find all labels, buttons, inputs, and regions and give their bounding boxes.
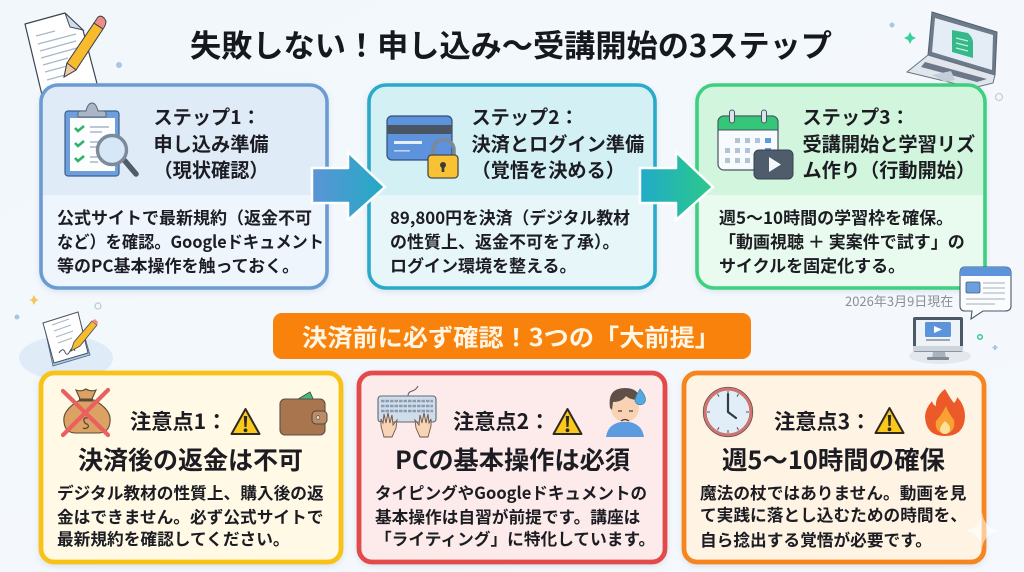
text: caution 3 label: 注意点3： [774, 405, 871, 436]
icon: wallet [280, 392, 327, 435]
text: step 3 body: サイクルを固定化する。 [719, 252, 905, 277]
heading: step 3: ステップ3： [802, 102, 910, 130]
text: step 2 body: 89,800円を決済（デジタル教材 [390, 204, 630, 229]
text: caution 2 body [375, 480, 655, 550]
heading: step 2 [472, 102, 644, 183]
heading: step 1 [154, 102, 269, 183]
text: caution 1 body [57, 480, 324, 550]
icon: browser speech bubble [960, 267, 1011, 319]
icon: keyboard with hands [378, 386, 436, 437]
text: step 1 body: 等のPC基本操作を触っておく。 [57, 252, 299, 277]
decorative dot [116, 62, 122, 68]
text: caution 1 body: 最新規約を確認してください。 [57, 526, 290, 550]
heading: caution 1: 決済後の返金は不可 [78, 441, 303, 477]
heading: step 1: 申し込み準備 [154, 129, 269, 157]
title: 失敗しない！申し込み〜受講開始の3ステップ [190, 21, 832, 66]
icon: warning triangle [232, 409, 260, 434]
text: caution 3 body [700, 480, 967, 551]
text: step 2 body: ログイン環境を整える。 [390, 252, 576, 277]
icon: warning triangle [554, 409, 582, 434]
panel: step 2 [369, 85, 655, 288]
heading: step 2: ステップ2： [472, 102, 579, 130]
text: step 1 body: など）を確認。Googleドキュメント [57, 228, 324, 253]
heading: step 1: （現状確認） [154, 155, 269, 183]
date note: 2026年3月9日現在 [845, 291, 953, 310]
icon: document and pencil top left [25, 13, 106, 95]
text: caution 1 body: デジタル教材の性質上、購入後の返 [57, 480, 324, 504]
text: step 3 body: 週5〜10時間の学習枠を確保。 [719, 204, 953, 229]
text: step 2 body: の性質上、返金不可を了承）。 [390, 228, 620, 253]
heading: caution 2: PCの基本操作は必須 [395, 441, 630, 477]
heading: step 1: ステップ1： [154, 102, 261, 130]
icon: wall clock [703, 387, 753, 437]
banner: 3 prerequisites [273, 313, 751, 359]
decorative dots left [14, 295, 101, 320]
text: caution 2 label: 注意点2： [453, 405, 550, 436]
icon: signing document with blob [19, 312, 113, 380]
panel: step 3 [697, 85, 985, 288]
icon: worried person [606, 388, 645, 437]
decorative dots right [978, 335, 998, 350]
panel: step 1 [41, 85, 327, 288]
text: step 1 body: 公式サイトで最新規約（返金不可 [57, 204, 312, 229]
decorative sparkle bottom right [966, 512, 1000, 548]
icon: crossed money bag [63, 389, 110, 435]
icon: flame [925, 389, 965, 436]
icon: video monitor [909, 317, 971, 364]
heading: step 3 [802, 102, 975, 183]
text: step 2 body [390, 204, 630, 277]
icon: warning triangle [876, 408, 904, 433]
text: step 3 body [719, 204, 965, 277]
heading: step 3: 受講開始と学習リズ [802, 129, 975, 157]
heading: step 2: 決済とログイン準備 [472, 129, 644, 157]
panel: caution 2 [359, 373, 665, 562]
text: caution 2 body: 「ライティング」に特化しています。 [375, 526, 655, 550]
text: caution 2 body: 基本操作は自習が前提です。講座は [375, 504, 641, 528]
text: caution 1 label: 注意点1： [130, 405, 227, 436]
arrow: step 1 to step 2 [312, 152, 385, 220]
decorative sparkles top right [890, 22, 1002, 100]
text: caution 1 body: 金はできません。必ず公式サイトで [57, 504, 324, 528]
text: step 3 body: 「動画視聴 ＋ 実案件で試す」の [719, 228, 965, 253]
icon: laptop top right [907, 12, 997, 88]
arrow: step 2 to step 3 [640, 152, 713, 220]
icon: credit card with padlock [387, 116, 458, 178]
text: caution 3 body: 魔法の杖ではありません。動画を見 [700, 480, 967, 504]
icon: clipboard with magnifier [65, 103, 136, 176]
panel: caution 3 [684, 373, 984, 562]
text: caution 3 body: 自ら捻出する覚悟が必要です。 [700, 527, 932, 551]
panel: caution 1 [41, 373, 341, 562]
text: step 1 body [57, 204, 324, 277]
banner: 3 prerequisites: 決済前に必ず確認！3つの「大前提」 [302, 318, 720, 353]
text: caution 2 body: タイピングやGoogleドキュメントの [375, 480, 647, 504]
heading: step 2: （覚悟を決める） [472, 155, 625, 183]
heading: caution 3: 週5〜10時間の確保 [722, 441, 945, 477]
heading: step 3: ム作り（行動開始） [802, 155, 975, 183]
icon: calendar with play button [718, 110, 793, 179]
text: caution 3 body: て実践に落とし込むための時間を、 [700, 502, 967, 526]
